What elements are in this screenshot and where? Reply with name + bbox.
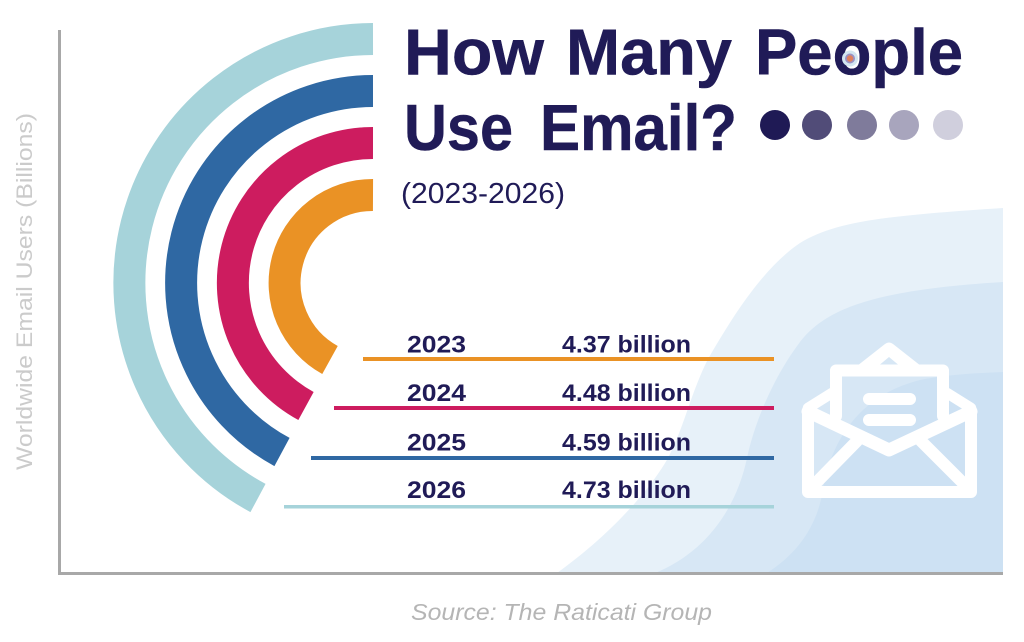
arc: 2026 — [129, 39, 373, 498]
title: People — [755, 16, 963, 88]
data row: 2023: 2023 — [407, 332, 466, 358]
data row: 2023 — [363, 332, 774, 361]
title: Email? — [540, 91, 737, 164]
icon: open envelope — [808, 342, 971, 492]
data row: 2025: 2025 — [407, 430, 466, 456]
y-axis label: Worldwide Email Users (Billions) — [12, 113, 37, 470]
title: How — [404, 16, 544, 88]
title — [404, 16, 963, 164]
data row: 2023: 4.37 billion — [562, 332, 691, 358]
icon: target inside letter o — [842, 50, 858, 66]
background wave: lightest — [557, 208, 1003, 573]
radial bar chart — [129, 39, 373, 498]
background wave: darkest — [767, 372, 1003, 573]
data row: 2024: 2024 — [407, 380, 467, 407]
arc: 2025 — [181, 91, 373, 452]
data row: 2024 — [334, 380, 774, 410]
arc: 2023 — [285, 195, 373, 360]
source note: Source: The Raticati Group — [411, 599, 712, 625]
data row: 2024: 4.48 billion — [562, 380, 691, 407]
title: Many — [566, 16, 732, 88]
arc: 2024 — [233, 143, 373, 406]
title: Use — [404, 91, 513, 164]
data row: 2025 — [311, 430, 774, 460]
data row: 2025: 4.59 billion — [562, 430, 691, 456]
data row: 2026 — [284, 477, 774, 508]
subtitle: (2023-2026) — [401, 178, 565, 210]
data row: 2026: 2026 — [407, 477, 466, 504]
chart axes — [60, 30, 1003, 574]
decorative dots — [760, 110, 963, 140]
background wave: middle — [655, 282, 1003, 573]
data row: 2026: 4.73 billion — [562, 477, 691, 504]
